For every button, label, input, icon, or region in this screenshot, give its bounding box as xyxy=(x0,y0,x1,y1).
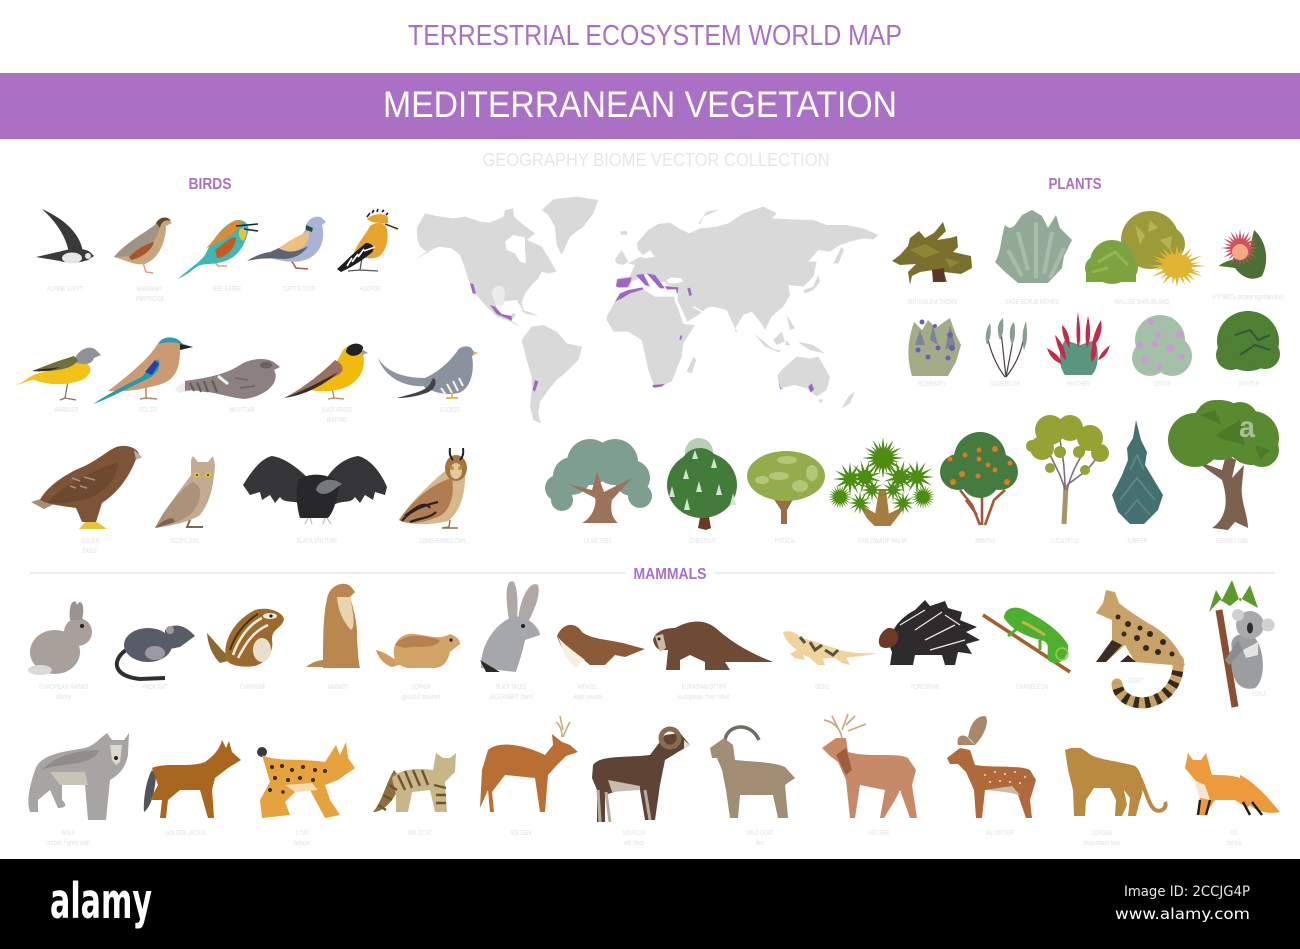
plant: sage scrub: SAGE SCRUB MITHED xyxy=(1005,299,1059,306)
tree: kermes oak xyxy=(1168,400,1279,545)
mammal: fallow deer: FALLOW DEER xyxy=(986,830,1014,837)
mammal: gopher xyxy=(376,634,460,701)
mammal: pack rat: PACK RAT xyxy=(143,684,168,691)
bird: bee-eater: BEE-EATER xyxy=(213,286,241,293)
bird: barbary partridge: BARBARY xyxy=(137,286,163,293)
bird: black vulture: BLACK VULTURE xyxy=(296,538,338,545)
mammal: wild goat: ibex xyxy=(756,840,764,847)
tree: fan dwarf palm xyxy=(825,437,938,545)
bird: nightjar: NIGHTJAR xyxy=(230,407,254,414)
tree: arbutus: ARBUTUS xyxy=(975,538,995,545)
plant: mallee shrubland xyxy=(1085,211,1206,306)
tree: chestnut xyxy=(667,438,737,545)
plant: myrtle: MYRTLE xyxy=(1239,381,1259,388)
plant: jerusalem thorn xyxy=(892,222,972,306)
world map xyxy=(415,197,878,423)
tree: kermes oak: KERMES OAK xyxy=(1216,538,1249,545)
mammal: lynx xyxy=(257,742,355,847)
plant: sage scrub xyxy=(995,210,1072,306)
bird: scops owl xyxy=(155,456,215,545)
bird: long-eared owl: LONG-EARED OWL xyxy=(420,538,467,545)
mammal: mouflon: wild sheep xyxy=(623,840,644,847)
mammal: red deer xyxy=(822,714,917,837)
mammal: roe deer: ROE DEER xyxy=(510,830,532,837)
mammal: mouflon xyxy=(592,729,690,847)
divider and heading: mammals: MAMMALS xyxy=(634,566,707,583)
tree: olive xyxy=(545,439,652,545)
mammal: black tailed jackrabbit xyxy=(480,581,540,701)
mammal: chameleon xyxy=(983,608,1070,691)
plant: mallee shrubland: MALLEE SHRUBLAND xyxy=(1114,299,1170,306)
tree: fan dwarf palm: FAN DWARF PALM xyxy=(858,538,906,545)
mammal: cougar: mountain lion xyxy=(1084,840,1121,847)
tree: juniper xyxy=(1112,420,1163,545)
mammal: weasel: least weasel xyxy=(574,694,602,701)
plant: cistus: CISTUS xyxy=(1154,381,1171,388)
mammal: eurasian otter: european river otter xyxy=(678,694,731,701)
bird: warbler xyxy=(16,348,101,414)
bird: hoopoe: HOOPOE xyxy=(360,286,381,293)
mammal: cougar xyxy=(1065,748,1166,847)
bird: long-eared owl xyxy=(399,448,467,545)
bird: cuckoo xyxy=(378,346,478,414)
mammal: roe deer xyxy=(480,716,578,837)
plant: protea: FYNBOS protea sgarlandius xyxy=(1213,294,1283,301)
bird: black headed bunting xyxy=(284,344,368,424)
mammal: gopher: GOPHER xyxy=(412,684,430,691)
footer bar: alamy xyxy=(50,873,152,930)
bird: turtle dove xyxy=(247,217,326,293)
plant: rosemary: ROSEMARY xyxy=(918,381,946,388)
mammal: gecko: GECKO xyxy=(815,684,829,691)
mammal: mouflon: MOUFLON xyxy=(623,830,645,837)
mammal: gecko xyxy=(783,631,877,691)
heading: plants: PLANTS xyxy=(1048,176,1102,193)
mammal: porcupine: PORCUPINE xyxy=(911,684,939,691)
mammal: fox: FOX xyxy=(1230,830,1238,837)
mammal: chipmunk: CHIPMUNK xyxy=(240,684,266,691)
mammal: wild goat: WILD GOAT xyxy=(746,830,775,837)
mammal: eurasian otter xyxy=(653,622,773,701)
footer bar: www.alamy.com xyxy=(1115,905,1250,923)
mammal: golden jackal: GOLDEN JACKAL xyxy=(165,830,207,837)
mammal: wolf: WOLF xyxy=(61,830,75,837)
mammal: lynx: LYNX xyxy=(296,830,308,837)
mammal: red deer: RED DEER xyxy=(869,830,889,837)
mammal: genet xyxy=(1096,590,1185,703)
panel: mammals xyxy=(28,566,1280,847)
bird: golden eagle: EAGLE xyxy=(83,548,97,555)
bird: alpine swift: ALPINE SWIFT xyxy=(47,286,84,293)
top heading: TERRESTRIAL ECOSYSTEM WORLD MAP xyxy=(408,20,902,52)
tree: eucalyptus: EUCALYPTUS xyxy=(1051,538,1079,545)
plant: jerusalem thorn: JERUSALEM THORN xyxy=(907,299,957,306)
mammal: koala: KOALA xyxy=(1252,691,1266,698)
bird: roller xyxy=(93,337,193,414)
mammal: gopher: ground squirrel xyxy=(402,694,440,701)
plant: heather: HEATHER xyxy=(1066,381,1090,388)
mammal: weasel xyxy=(557,625,645,701)
tree: olive: OLIVE TREE xyxy=(584,538,612,545)
mammal: weasel: WEASEL xyxy=(578,684,598,691)
mammal: black tailed jackrabbit: JACKRABBIT (hare) xyxy=(489,694,533,701)
title band: MEDITERRANEAN VEGETATION xyxy=(383,84,897,125)
mammal: european rabbit xyxy=(28,601,92,701)
bird: turtle dove: TURTLE DOVE xyxy=(282,286,316,293)
mammal: wolf xyxy=(28,733,129,847)
mammal: fallow deer xyxy=(947,716,1036,837)
bird: cuckoo: CUCKOO xyxy=(440,407,460,414)
bird: scops owl: SCOPS OWL xyxy=(170,538,200,545)
mammal: european rabbit: EUROPEAN RABBIT xyxy=(39,684,90,691)
mammal: marmot: MARMOT xyxy=(328,684,348,691)
mammal: chipmunk xyxy=(207,609,284,691)
tree: eucalyptus xyxy=(1026,415,1109,545)
bird: alpine swift xyxy=(36,209,94,293)
panel: birds xyxy=(16,176,478,555)
mammal: marmot xyxy=(306,584,360,691)
plant: protea xyxy=(1213,227,1283,301)
mammal: european rabbit: bunny xyxy=(56,694,72,701)
plant: sagebrush: SAGEBRUSH xyxy=(990,381,1020,388)
plant: rosemary xyxy=(908,318,961,388)
mammal: cougar: COUGAR xyxy=(1092,830,1112,837)
mammal: chameleon: CHAMELEON xyxy=(1016,684,1048,691)
tree: chestnut: CHESTNUT xyxy=(690,538,716,545)
plant: myrtle xyxy=(1216,311,1280,388)
subtitle: GEOGRAPHY BIOME VECTOR COLLECTION xyxy=(482,150,830,170)
mammal: black tailed jackrabbit: BLACK TAILED xyxy=(496,684,526,691)
bird: barbary partridge xyxy=(114,217,172,303)
bird: warbler: WARBLER xyxy=(54,407,78,414)
bird: golden eagle xyxy=(31,446,142,555)
panel: plants xyxy=(545,176,1283,545)
footer bar: Image ID: 2CCJG4P xyxy=(1124,884,1250,900)
mammal: fox xyxy=(1185,753,1280,847)
mammal: wolf: timber / grey wolf xyxy=(46,840,90,847)
watermark on oak: a xyxy=(1239,411,1255,444)
mammal: genet: GENET xyxy=(1128,678,1144,685)
bird: bee-eater xyxy=(178,220,258,293)
bird: black headed bunting: BUNTING xyxy=(327,417,347,424)
tree: pistacia: PISTACIA xyxy=(775,538,795,545)
bird: black vulture xyxy=(243,456,387,545)
title band xyxy=(0,73,1300,139)
mammal: wild goat xyxy=(710,727,795,847)
plant: heather xyxy=(1047,312,1110,388)
mammal: pack rat xyxy=(117,625,195,691)
heading: birds: BIRDS xyxy=(188,176,232,193)
plant: cistus xyxy=(1132,315,1192,388)
mammal: porcupine xyxy=(879,600,980,691)
mammal: wildcat xyxy=(373,753,456,837)
bird: black headed bunting: BLACK HEADED xyxy=(322,407,352,414)
tree: juniper: JUNIPER xyxy=(1127,538,1147,545)
tree: pistacia xyxy=(747,451,825,545)
bird: barbary partridge: PARTRIDGE xyxy=(136,296,164,303)
tree: arbutus xyxy=(940,432,1018,545)
bird: nightjar xyxy=(175,359,280,414)
mammal: fox: red fox xyxy=(1226,840,1242,847)
mammal: eurasian otter: EURASIAN OTTER xyxy=(682,684,726,691)
footer bar xyxy=(0,859,1300,949)
mammal: lynx: bobcat xyxy=(294,840,310,847)
mammal: golden jackal xyxy=(144,740,241,837)
mammal: wildcat: WILDCAT xyxy=(408,830,433,837)
bird: hoopoe xyxy=(337,209,398,293)
bird: golden eagle: GOLDEN xyxy=(81,538,99,545)
bird: roller: ROLLER xyxy=(139,407,157,414)
plant: sagebrush xyxy=(986,318,1027,388)
mammal: koala xyxy=(1209,580,1274,707)
